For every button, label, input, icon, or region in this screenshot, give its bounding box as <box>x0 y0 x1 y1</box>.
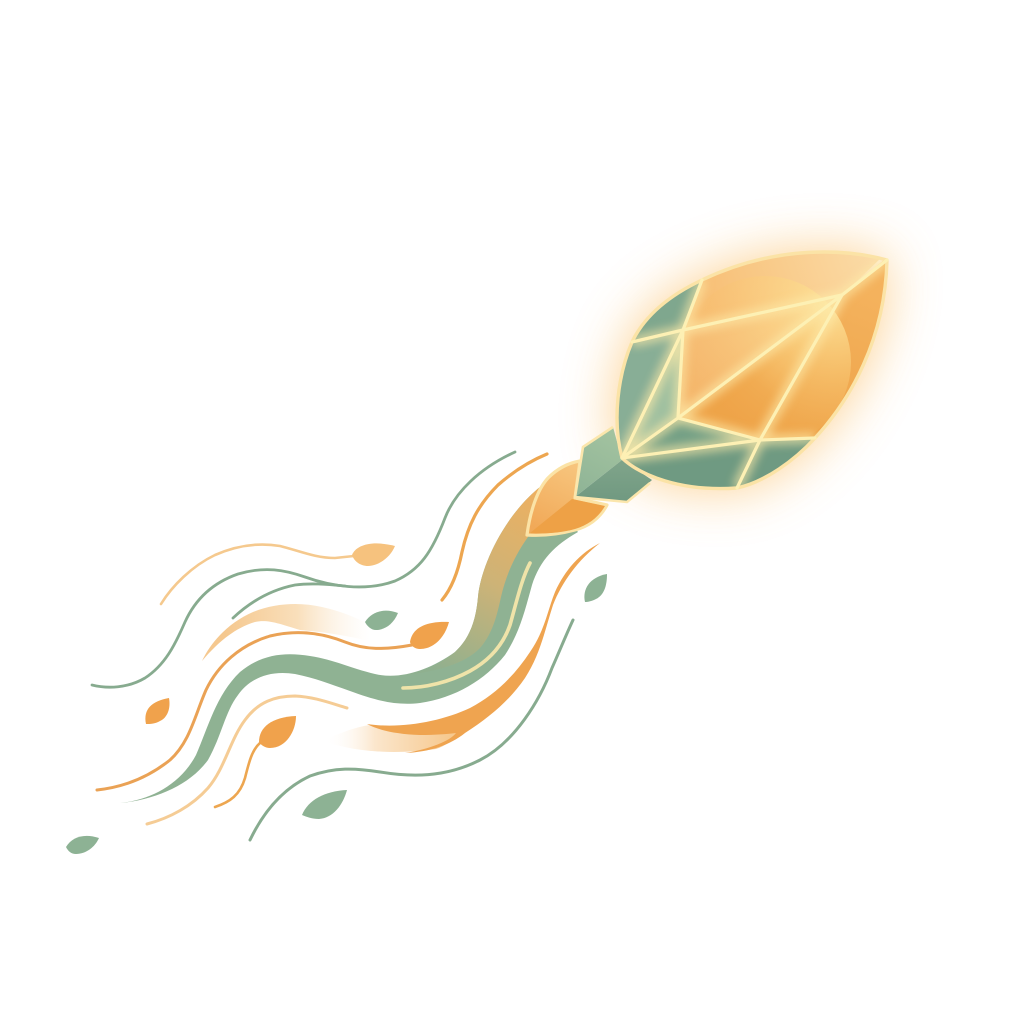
stream: main ribbon <box>120 487 578 803</box>
facet: inner disc <box>746 286 851 418</box>
leaf: green far bottom-left <box>66 836 99 854</box>
leaf bud with stem: orange <box>215 716 296 807</box>
facet: green bottom <box>626 442 758 487</box>
main faceted leaf <box>615 250 889 490</box>
illustration: faceted leaf with flowing trail <box>66 215 920 854</box>
facet: centre upper <box>680 324 748 414</box>
stream: thin green strand long <box>92 452 515 687</box>
stream: thin green branch <box>233 584 345 618</box>
stream: large orange swoosh <box>367 543 600 753</box>
diamond: light facet <box>575 427 622 497</box>
ribbon: tan upper section <box>405 487 540 675</box>
facet lines glow <box>622 260 887 488</box>
stream: medium orange strand <box>97 633 412 790</box>
stream: thin light orange strand <box>161 545 354 604</box>
leaf: green right <box>584 574 607 602</box>
leaf outline <box>617 252 887 489</box>
small orange faceted leaf <box>527 461 607 535</box>
stream: light orange medium strand <box>147 696 347 824</box>
facet: green top-left <box>635 283 699 340</box>
facet: green left <box>618 332 680 453</box>
facet: right <box>763 260 886 438</box>
facet lines <box>622 260 887 488</box>
leaf: lone orange <box>145 698 170 724</box>
stream: fading band under swoosh <box>322 725 458 752</box>
small leaf: darker lower facet <box>530 499 605 533</box>
stream: thin orange strand <box>442 454 547 600</box>
facet: green mid-lower <box>628 420 752 456</box>
facet: top <box>686 254 879 328</box>
stream: fading light orange band <box>202 604 372 661</box>
leaf bud: light orange <box>352 543 395 566</box>
diamond connector <box>575 427 652 502</box>
glow behind leaf <box>617 252 887 489</box>
ribbon: cream centre line <box>403 563 530 688</box>
leaf bud: orange <box>410 622 449 649</box>
stream: thin green strand bottom <box>250 620 573 840</box>
leaf: green bottom <box>302 790 347 819</box>
ribbon: green body <box>120 487 578 803</box>
diamond: dark facet <box>575 460 652 502</box>
facet: green bottom-right <box>741 440 811 486</box>
leaf: small green center <box>365 611 398 630</box>
facet: green inner <box>626 338 681 453</box>
facet: centre lower <box>682 302 836 438</box>
